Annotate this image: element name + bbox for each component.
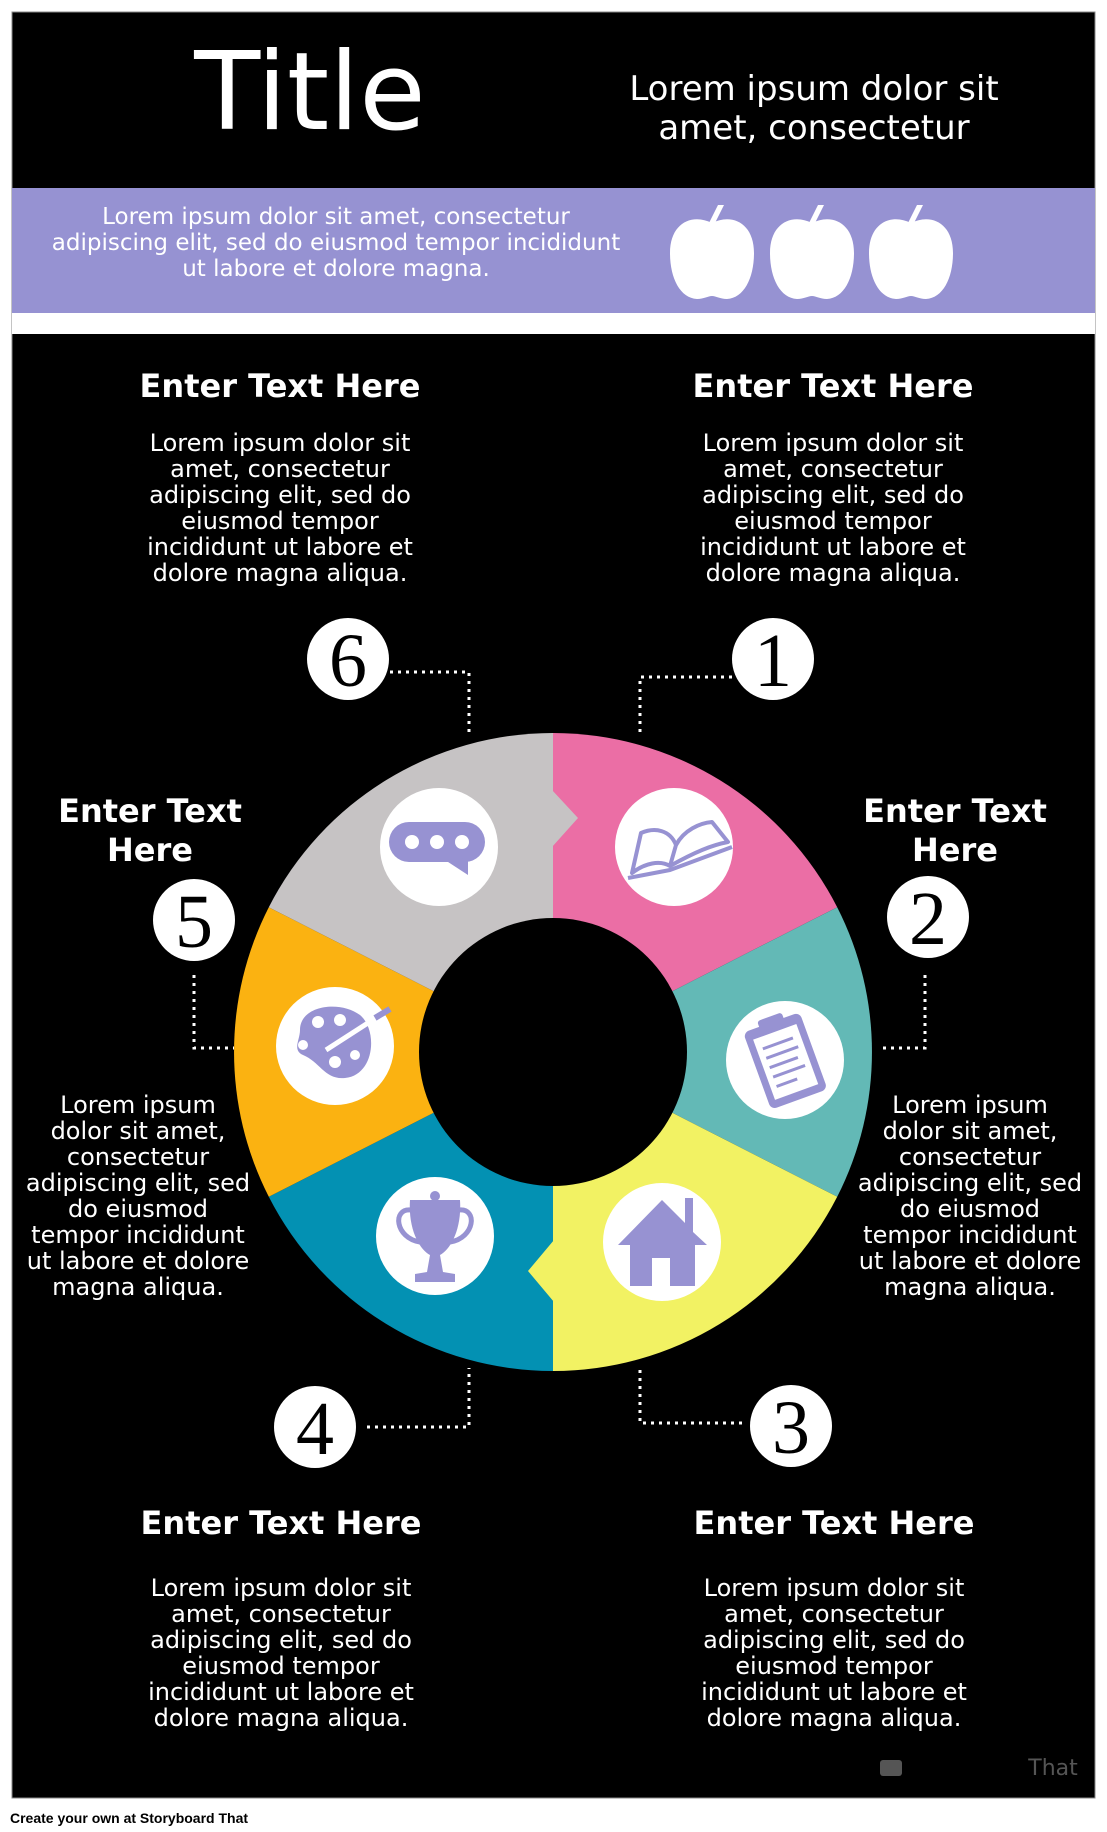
text block: right: dolor sit amet, xyxy=(883,1117,1057,1145)
text block: bottom left: adipiscing elit, sed do xyxy=(150,1626,412,1654)
text block: top left xyxy=(140,367,420,587)
text block: right: Enter Text xyxy=(863,792,1047,830)
text block: top right: dolore magna aliqua. xyxy=(706,559,960,587)
text block: bottom left: eiusmod tempor xyxy=(182,1652,380,1680)
text block: top right: adipiscing elit, sed do xyxy=(702,481,964,509)
text block: right: ut labore et dolore xyxy=(859,1247,1081,1275)
text block: top right xyxy=(693,367,973,587)
subtitle xyxy=(629,69,999,148)
text block: right: Here xyxy=(912,831,998,869)
text block: left: dolor sit amet, xyxy=(51,1117,225,1145)
text block: top right: eiusmod tempor xyxy=(734,507,932,535)
text block: top left: Enter Text Here xyxy=(140,367,420,405)
text block: bottom right: adipiscing elit, sed do xyxy=(703,1626,965,1654)
text block: bottom right xyxy=(694,1504,974,1732)
text block: right: magna aliqua. xyxy=(884,1273,1056,1301)
number badges: 1 xyxy=(754,619,792,703)
icon: trophy xyxy=(376,1177,494,1295)
number badges: 3 xyxy=(772,1386,810,1470)
text block: bottom right: incididunt ut labore et xyxy=(701,1678,967,1706)
text block: right: do eiusmod xyxy=(900,1195,1040,1223)
text block: top left: incididunt ut labore et xyxy=(147,533,413,561)
banner xyxy=(12,188,1095,334)
text block: bottom right: dolore magna aliqua. xyxy=(707,1704,961,1732)
text block: right: tempor incididunt xyxy=(863,1221,1077,1249)
number badges: 6 xyxy=(329,619,367,703)
banner text: Lorem ipsum dolor sit amet, consectetur xyxy=(102,204,570,230)
text block: bottom left: dolore magna aliqua. xyxy=(154,1704,408,1732)
subtitle: Lorem ipsum dolor sit xyxy=(629,69,999,109)
number badges: 2 xyxy=(909,877,947,961)
title: Title xyxy=(193,30,426,155)
text block: left: Here xyxy=(107,831,193,869)
subtitle: amet, consectetur xyxy=(658,108,970,148)
text block: bottom right: Lorem ipsum dolor sit xyxy=(704,1574,964,1602)
text block: top right: incididunt ut labore et xyxy=(700,533,966,561)
text block: right: adipiscing elit, sed xyxy=(858,1169,1082,1197)
number badges xyxy=(153,618,969,1471)
text block: top right: Lorem ipsum dolor sit xyxy=(703,429,963,457)
text block: bottom right: eiusmod tempor xyxy=(735,1652,933,1680)
text block: left: Lorem ipsum xyxy=(60,1091,216,1119)
icon: book xyxy=(615,788,733,906)
number badges: 5 xyxy=(175,880,213,964)
text block: left: adipiscing elit, sed xyxy=(26,1169,250,1197)
icon: palette xyxy=(276,987,394,1105)
icon: clipboard xyxy=(726,1001,844,1119)
watermark xyxy=(880,1756,1078,1781)
text block: top left: amet, consectetur xyxy=(170,455,390,483)
text block: bottom left xyxy=(141,1504,421,1732)
text block: bottom right: Enter Text Here xyxy=(694,1504,974,1542)
wheel xyxy=(234,733,872,1371)
text block: bottom left: amet, consectetur xyxy=(171,1600,391,1628)
text block: left: ut labore et dolore xyxy=(27,1247,249,1275)
icon: apples xyxy=(670,205,953,299)
text block: bottom left: Lorem ipsum dolor sit xyxy=(151,1574,411,1602)
watermark: That xyxy=(1027,1756,1078,1781)
text block: right: Lorem ipsum xyxy=(892,1091,1048,1119)
connectors xyxy=(194,672,925,1427)
text block: top right: Enter Text Here xyxy=(693,367,973,405)
banner text: ut labore et dolore magna. xyxy=(182,256,490,282)
number badges: 4 xyxy=(296,1387,334,1471)
text block: bottom left: incididunt ut labore et xyxy=(148,1678,414,1706)
text block: left: do eiusmod xyxy=(68,1195,208,1223)
footer: Create your own at Storyboard That xyxy=(10,1810,248,1826)
banner text: adipiscing elit, sed do eiusmod tempor incididunt xyxy=(52,230,620,256)
banner text xyxy=(52,204,620,282)
text block: right: consectetur xyxy=(899,1143,1041,1171)
text block: right xyxy=(858,792,1082,1301)
text block: left: Enter Text xyxy=(58,792,242,830)
icon: house xyxy=(603,1183,721,1301)
icon: chat bubble xyxy=(380,788,498,906)
text block: bottom right: amet, consectetur xyxy=(724,1600,944,1628)
text block: left: tempor incididunt xyxy=(31,1221,245,1249)
text block: top right: amet, consectetur xyxy=(723,455,943,483)
text block: top left: adipiscing elit, sed do xyxy=(149,481,411,509)
text block: top left: Lorem ipsum dolor sit xyxy=(150,429,410,457)
text block: left xyxy=(26,792,250,1301)
text block: top left: eiusmod tempor xyxy=(181,507,379,535)
text block: bottom left: Enter Text Here xyxy=(141,1504,421,1542)
text block: left: magna aliqua. xyxy=(52,1273,224,1301)
text block: top left: dolore magna aliqua. xyxy=(153,559,407,587)
text block: left: consectetur xyxy=(67,1143,209,1171)
